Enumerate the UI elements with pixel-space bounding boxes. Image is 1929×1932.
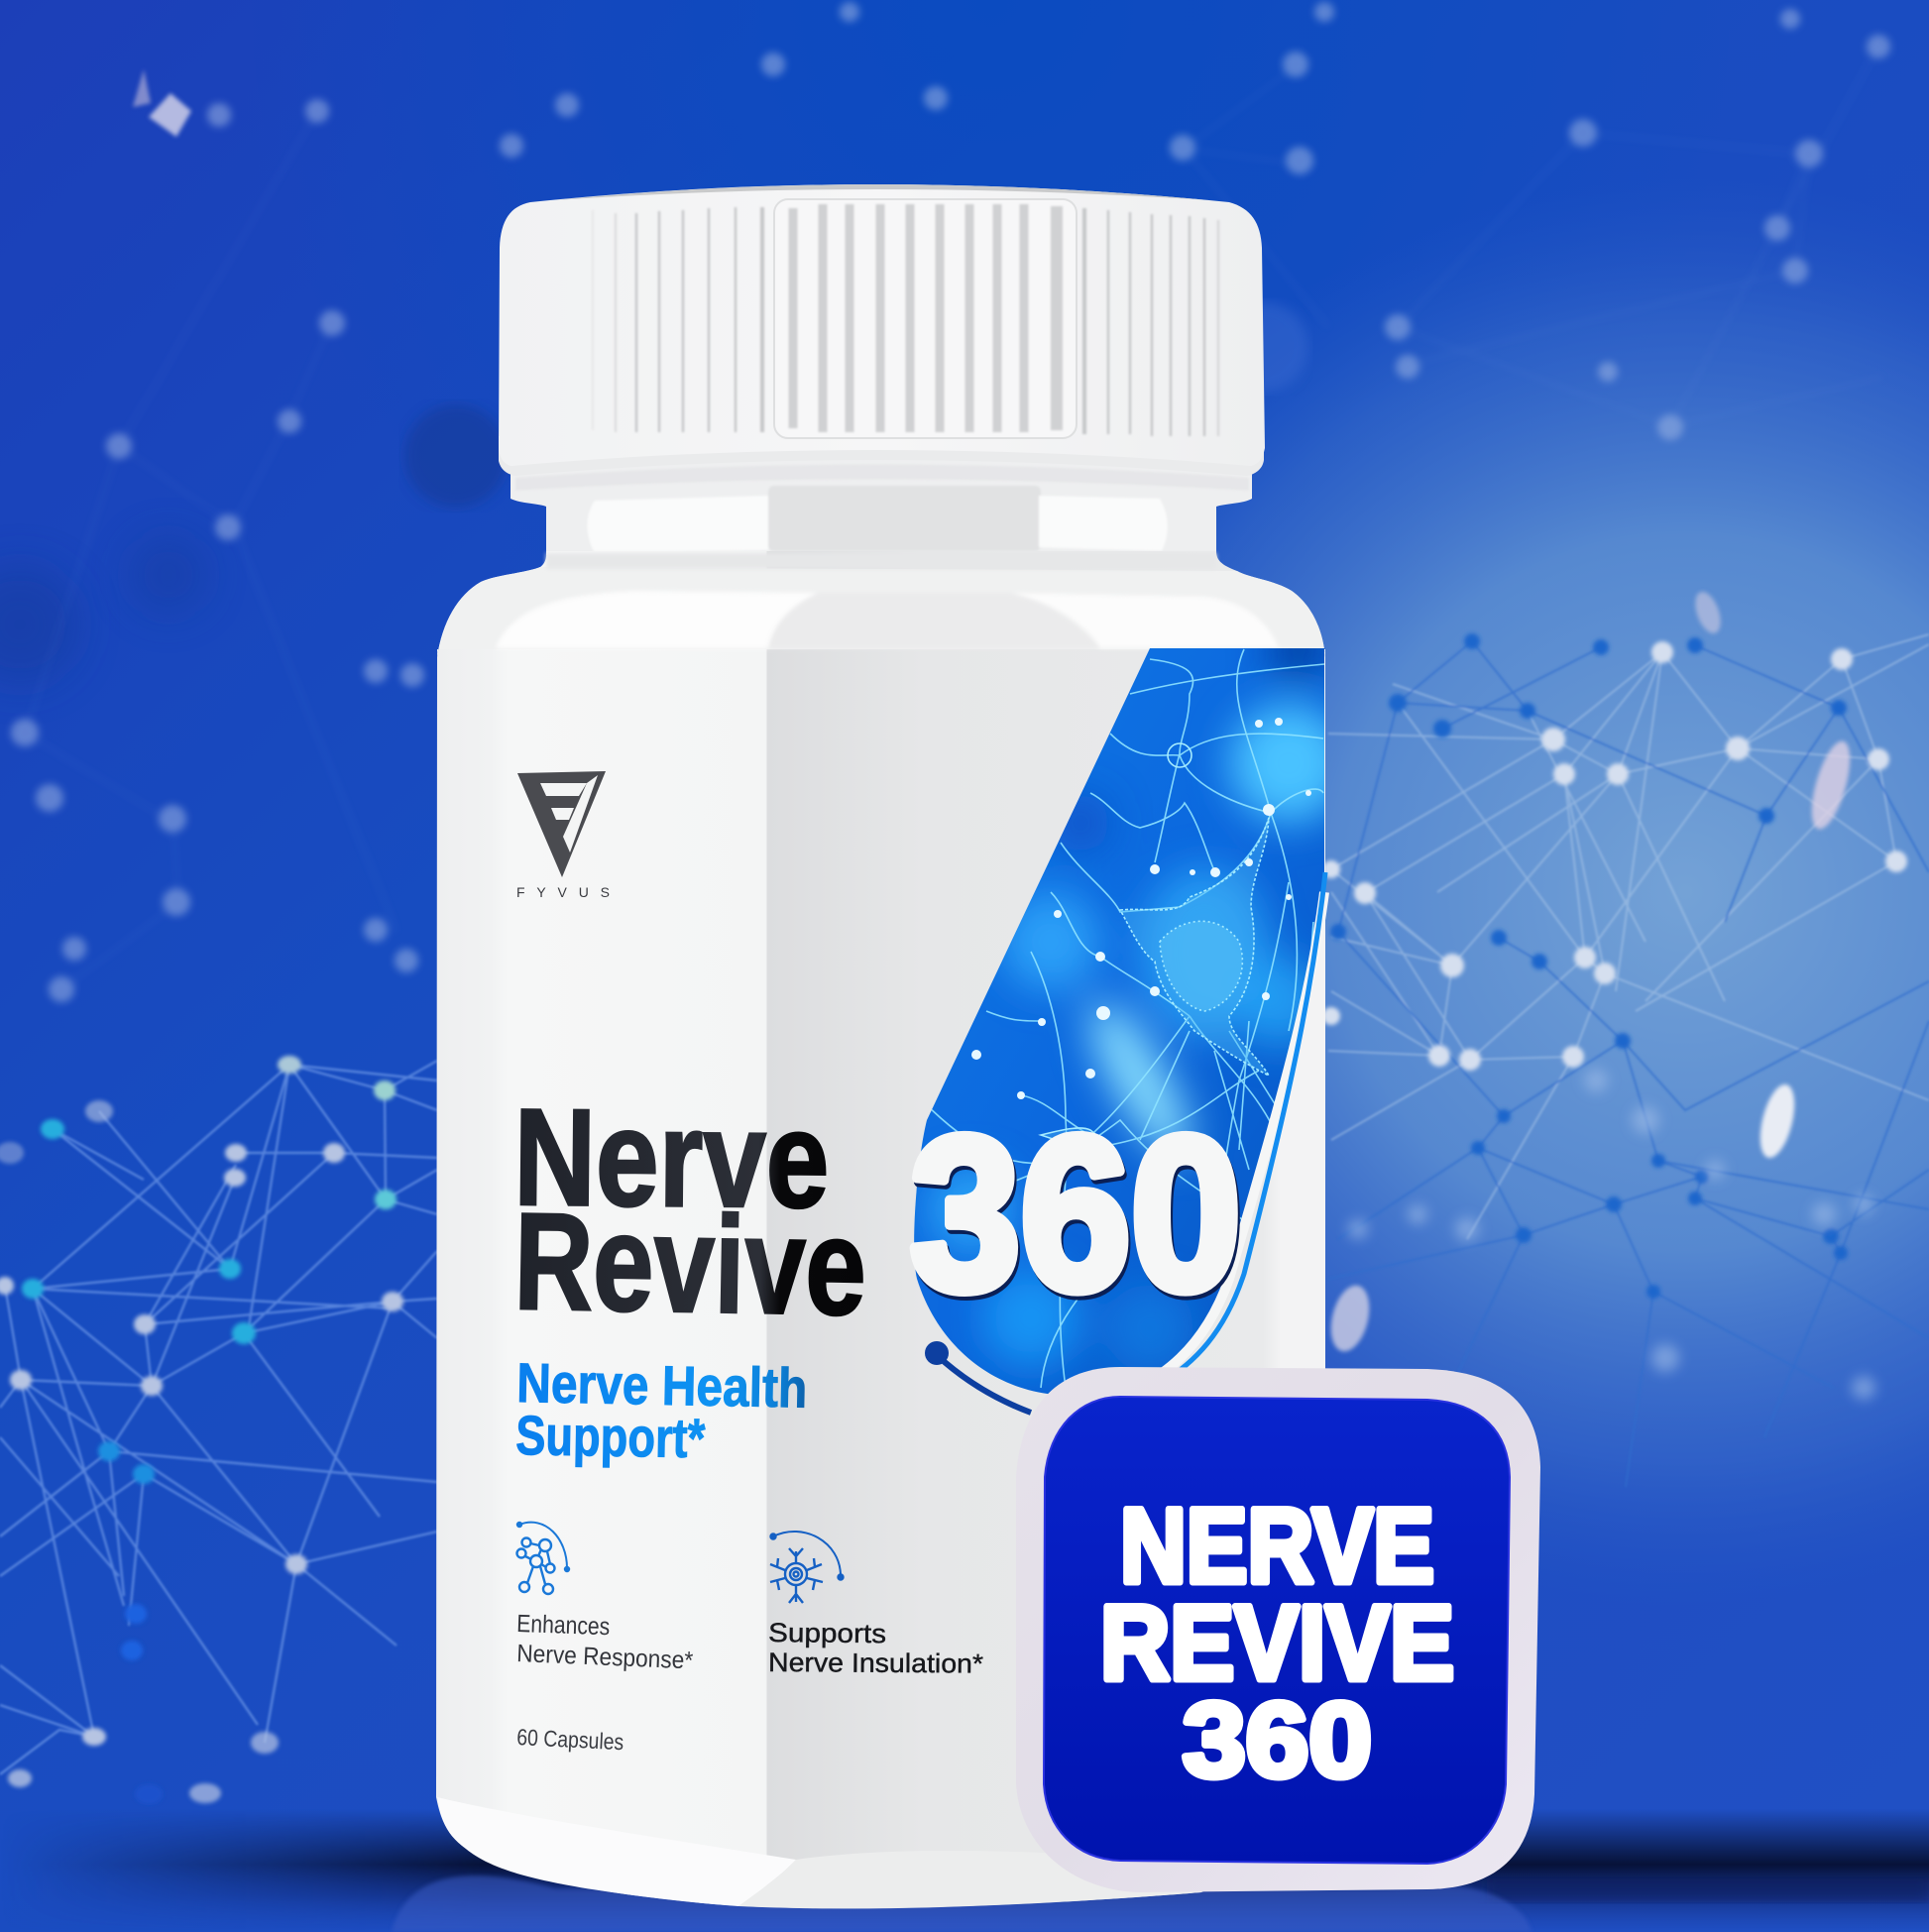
icon: nerve insulation [770,1532,843,1603]
background: floating petals [133,69,1858,1355]
label art: glows [927,620,1348,1373]
bottle: cap ridges thin [593,207,1218,436]
bottle: cap top edge [555,184,1209,200]
product name: Revive [512,1185,867,1344]
label art: curved white and blue stripe [1120,872,1325,1392]
product name [512,1080,867,1344]
bottle: cap [499,184,1265,466]
product name: Nerve [513,1080,830,1237]
text: enhances nerve response: Enhances [516,1610,611,1641]
text: supports nerve insulation: Supports [768,1618,886,1648]
background: right network lines [1328,634,1929,1487]
label art: neuron fibres [922,649,1324,1388]
tagline: Nerve Health [516,1351,808,1420]
background: left network nodes [0,1056,403,1804]
bottle: cap central grip band [774,199,1077,438]
badge: blue face [1044,1397,1510,1864]
bottle reflection [392,1875,1532,1932]
bottle: body shell [436,551,1325,1908]
360 large numeral: 360 [912,1095,1243,1339]
tagline: Support* [515,1404,706,1469]
bottle [436,184,1325,1908]
360 large numeral: 360 [910,1091,1241,1335]
label art: neuron body [1041,743,1269,1140]
brand logo [516,771,610,900]
bottle: shoulder [437,553,1325,657]
label art: sparkles [971,718,1311,1099]
background: faint upper network [11,2,1890,1002]
logo mark [517,771,606,877]
background: left network lines [0,1061,437,1774]
badge: outer frame [1016,1367,1540,1892]
badge: text [1100,1486,1454,1799]
text: enhances nerve response [516,1610,694,1674]
curve accent: dark blue arc with dot [925,1341,1031,1413]
bottle: neck [511,436,1252,555]
background: right network nodes [1322,633,1907,1400]
badge: text: NERVE [1120,1486,1434,1605]
bottle: cap lower rim [499,436,1264,476]
badge: text: 360 [1183,1680,1372,1799]
floor shadow band [0,1809,1929,1932]
text: supports nerve insulation: Nerve Insulation* [768,1648,984,1679]
tagline [515,1351,808,1469]
text: capsule count: 60 Capsules [516,1724,624,1755]
bottle: bottom highlight [437,1797,796,1906]
label art: neuron panel [892,620,1348,1418]
bottle: bottom right tone [738,1851,1201,1908]
badge [1016,1367,1540,1892]
text: enhances nerve response: Nerve Response* [516,1640,694,1674]
badge: text: REVIVE [1100,1583,1454,1702]
logo wordmark: FYVUS [516,884,610,900]
text: supports nerve insulation [768,1618,984,1679]
icon: nerve network [517,1523,569,1594]
bottle: neck highlights [515,464,1249,553]
